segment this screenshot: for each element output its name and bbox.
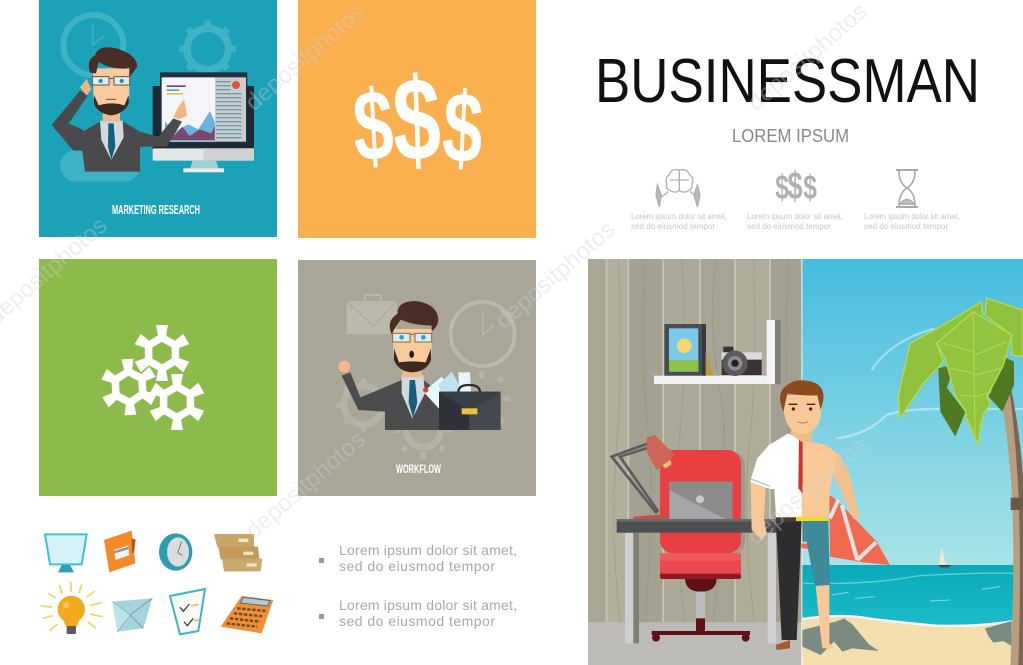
caption: workflow: WORKFLOW	[396, 462, 441, 476]
wood wall	[588, 259, 801, 622]
sky	[802, 259, 1023, 566]
palm tree	[898, 298, 1023, 665]
background envelope	[347, 295, 397, 334]
face	[784, 395, 821, 434]
icon: dollar signs	[350, 53, 486, 186]
surprised businessman	[338, 301, 443, 430]
camera	[722, 347, 762, 376]
laptop	[669, 482, 732, 519]
bullet item 2: sed do eiusmod tempor	[339, 613, 495, 629]
icon: small dollars: $	[775, 169, 789, 207]
top info column: time	[864, 170, 960, 231]
icon: envelope	[112, 598, 152, 632]
shirt	[750, 433, 802, 517]
icon: small dollars	[775, 165, 817, 208]
panel: money	[298, 0, 536, 238]
text	[747, 212, 843, 231]
icon: dollar signs: $	[390, 53, 443, 186]
trousers	[776, 522, 802, 640]
icon: computer monitor	[153, 72, 254, 172]
leg	[816, 585, 834, 648]
icon: dollar signs: $	[440, 72, 486, 185]
bullet item 1: Lorem ipsum dolor sit amet,	[339, 542, 517, 558]
shelf	[654, 320, 781, 384]
icon: checklist	[170, 589, 205, 634]
neck	[790, 425, 812, 442]
text: Lorem ipsum dolor sit amet,	[864, 212, 960, 221]
icon: background clock	[63, 15, 123, 75]
text: Lorem ipsum dolor sit amet,	[747, 212, 843, 221]
chair	[652, 450, 750, 642]
bullet item 1: sed do eiusmod tempor	[339, 558, 495, 574]
palm leaves	[898, 298, 1023, 445]
icon: briefcase	[439, 385, 501, 430]
tie	[798, 440, 803, 493]
watermarks: depositphotos	[240, 0, 371, 117]
icon: small dollars: $	[787, 165, 803, 208]
desk lamp	[612, 435, 675, 521]
floor	[588, 622, 801, 665]
sand	[802, 616, 1023, 665]
icon: background gear	[179, 21, 236, 77]
shorts	[802, 521, 830, 587]
text: sed do eiusmod tempor	[631, 222, 715, 231]
scene: office half	[588, 259, 801, 665]
businessman half and half	[750, 380, 859, 650]
bullet item 2	[319, 597, 517, 629]
arm left	[751, 482, 767, 540]
top info column: brain	[631, 170, 727, 231]
panel: workflow	[298, 260, 536, 496]
clouds	[837, 328, 1023, 438]
bottom text block	[319, 542, 517, 629]
sailboat	[938, 548, 951, 567]
flat icon set	[41, 531, 273, 634]
text: sed do eiusmod tempor	[747, 222, 831, 231]
hair	[780, 380, 824, 412]
belts	[776, 517, 802, 522]
text	[864, 212, 960, 231]
top info column: money	[747, 165, 843, 231]
arm right	[833, 452, 859, 519]
sea	[802, 565, 1023, 628]
bullet item 1	[319, 542, 517, 574]
icon: notebook	[104, 531, 136, 572]
icon: cardboard boxes	[214, 534, 262, 571]
businessman pointing	[52, 47, 187, 172]
shoe	[776, 640, 790, 650]
panel: marketing research	[39, 0, 277, 237]
icon: small dollars: $	[803, 169, 817, 207]
desk	[617, 519, 780, 643]
icon: calculator	[221, 596, 273, 633]
text: sed do eiusmod tempor	[864, 222, 948, 231]
watermarks: depositphotos	[240, 426, 371, 545]
watermarks	[0, 0, 873, 551]
text	[631, 212, 727, 231]
torso	[802, 440, 838, 517]
shadows on sand	[802, 618, 1012, 655]
icon: brain with rockets	[656, 170, 700, 207]
background gears	[337, 371, 511, 459]
background clock	[451, 302, 515, 366]
surfboard	[802, 495, 890, 565]
sleeve cuff	[751, 479, 770, 486]
icon: monitor	[45, 534, 87, 572]
bullet item 2: Lorem ipsum dolor sit amet,	[339, 597, 517, 613]
icon: three hex gears	[100, 325, 204, 430]
eyes	[789, 402, 815, 406]
watermarks: depositphotos	[742, 0, 873, 117]
icon: hourglass	[896, 170, 918, 207]
icon: wall clock	[159, 533, 192, 571]
papers	[423, 372, 471, 412]
icon: light bulb	[41, 582, 103, 634]
panel: gears	[39, 259, 277, 496]
watermarks: depositphotos	[490, 216, 621, 335]
watermarks: depositphotos	[742, 432, 873, 551]
scene: beach half	[750, 259, 1023, 665]
subtitle: LOREM IPSUM	[732, 126, 849, 146]
background blob	[60, 150, 140, 182]
trunk	[997, 369, 1023, 665]
caption: marketing research: MARKETING RESEARCH	[112, 202, 200, 217]
picture frame	[664, 324, 713, 376]
icon: dollar signs: $	[350, 70, 396, 183]
text: Lorem ipsum dolor sit amet,	[631, 212, 727, 221]
